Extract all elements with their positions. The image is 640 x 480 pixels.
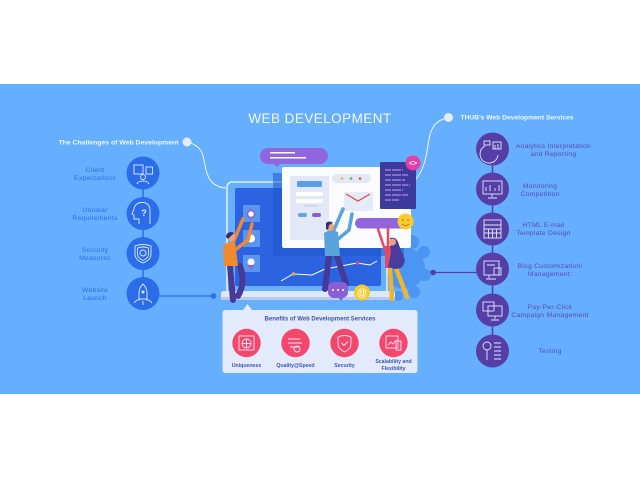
icon: client expectations <box>126 156 160 190</box>
laptop <box>221 182 395 300</box>
icon: unclear requirements <box>126 197 160 230</box>
label: monitoring: Competition <box>520 191 560 198</box>
benefit: security: Security <box>334 363 355 369</box>
label: monitoring <box>520 183 560 198</box>
label: html email <box>516 222 571 237</box>
label: website launch: Website <box>82 287 108 294</box>
illustration: web development scene <box>221 148 431 301</box>
icon: pay per click <box>476 294 509 326</box>
label: security measures: Security <box>82 247 109 254</box>
label: unclear requirements: Requirements <box>72 215 118 222</box>
label: unclear requirements: Unclear <box>82 207 108 214</box>
heading: benefits: Benefits of Web Development Services <box>265 316 376 322</box>
label: pay per click <box>511 304 589 319</box>
person right <box>378 228 407 299</box>
label: analytics: and Reporting <box>531 151 576 158</box>
label: blog: Blog Customization/ <box>517 263 583 270</box>
app window <box>273 167 411 256</box>
benefit: scalability: Flexibility <box>382 366 406 372</box>
benefit: uniqueness <box>232 329 261 369</box>
icon: blog <box>476 252 509 286</box>
label: html email: HTML E-mail <box>522 222 565 229</box>
title: WEB DEVELOPMENT <box>248 111 392 126</box>
label: security measures: Measures <box>79 255 111 262</box>
panel: benefits <box>222 304 418 373</box>
icon: unclear requirements: ? <box>141 208 147 218</box>
purple bar and smiley <box>355 214 414 230</box>
label: monitoring: Monitoring <box>523 183 557 190</box>
screen icons <box>243 205 260 272</box>
person left <box>223 219 252 300</box>
label: testing: Testing <box>538 348 562 355</box>
label: html email: Template Design <box>516 230 571 237</box>
chat bubble <box>328 282 348 301</box>
line chart <box>281 261 377 281</box>
label: unclear requirements <box>72 207 118 222</box>
code panel: <> <box>409 160 417 168</box>
icon: testing <box>476 334 509 368</box>
benefit: scalability: Scalability and <box>375 359 412 365</box>
label: website launch <box>82 287 108 302</box>
speech bubble <box>260 148 328 167</box>
benefit: security <box>330 329 359 369</box>
label: analytics <box>516 143 591 158</box>
label: client expectations: Expectations <box>74 175 116 182</box>
heading: challenges: The Challenges of Web Development <box>58 140 179 146</box>
at sign badge: @ <box>357 288 367 299</box>
at sign badge <box>354 284 370 300</box>
label: pay per click: Campaign Management <box>511 312 589 319</box>
person centre <box>324 209 352 289</box>
heading: services: THUB's Web Development Services <box>461 114 574 122</box>
right connector curve <box>415 113 453 180</box>
label: pay per click: Pay-Per-Click <box>528 304 573 311</box>
icon: monitoring <box>476 172 509 206</box>
panel: services list <box>430 132 591 368</box>
label: client expectations <box>74 167 116 182</box>
icon: analytics <box>476 132 509 166</box>
icon: html email <box>476 212 509 246</box>
benefit: quality at speed: Quality@Speed <box>276 363 315 369</box>
benefit: uniqueness: Uniqueness <box>232 363 261 369</box>
benefit: scalability <box>375 329 412 372</box>
label: blog <box>517 263 583 278</box>
label: client expectations: Client <box>86 167 104 174</box>
background band <box>0 84 640 394</box>
code panel <box>380 156 420 209</box>
left connector curve <box>182 138 226 188</box>
icon: security measures <box>126 237 160 270</box>
label: blog: Management: <box>528 271 572 278</box>
label: analytics: Analytics Interpretation <box>516 143 591 150</box>
panel: challenges list <box>72 156 216 310</box>
gear <box>383 235 431 301</box>
label: website launch: Launch <box>83 295 107 302</box>
benefit: quality at speed <box>276 329 315 369</box>
icon: website launch <box>126 277 160 310</box>
label: security measures <box>79 247 111 262</box>
